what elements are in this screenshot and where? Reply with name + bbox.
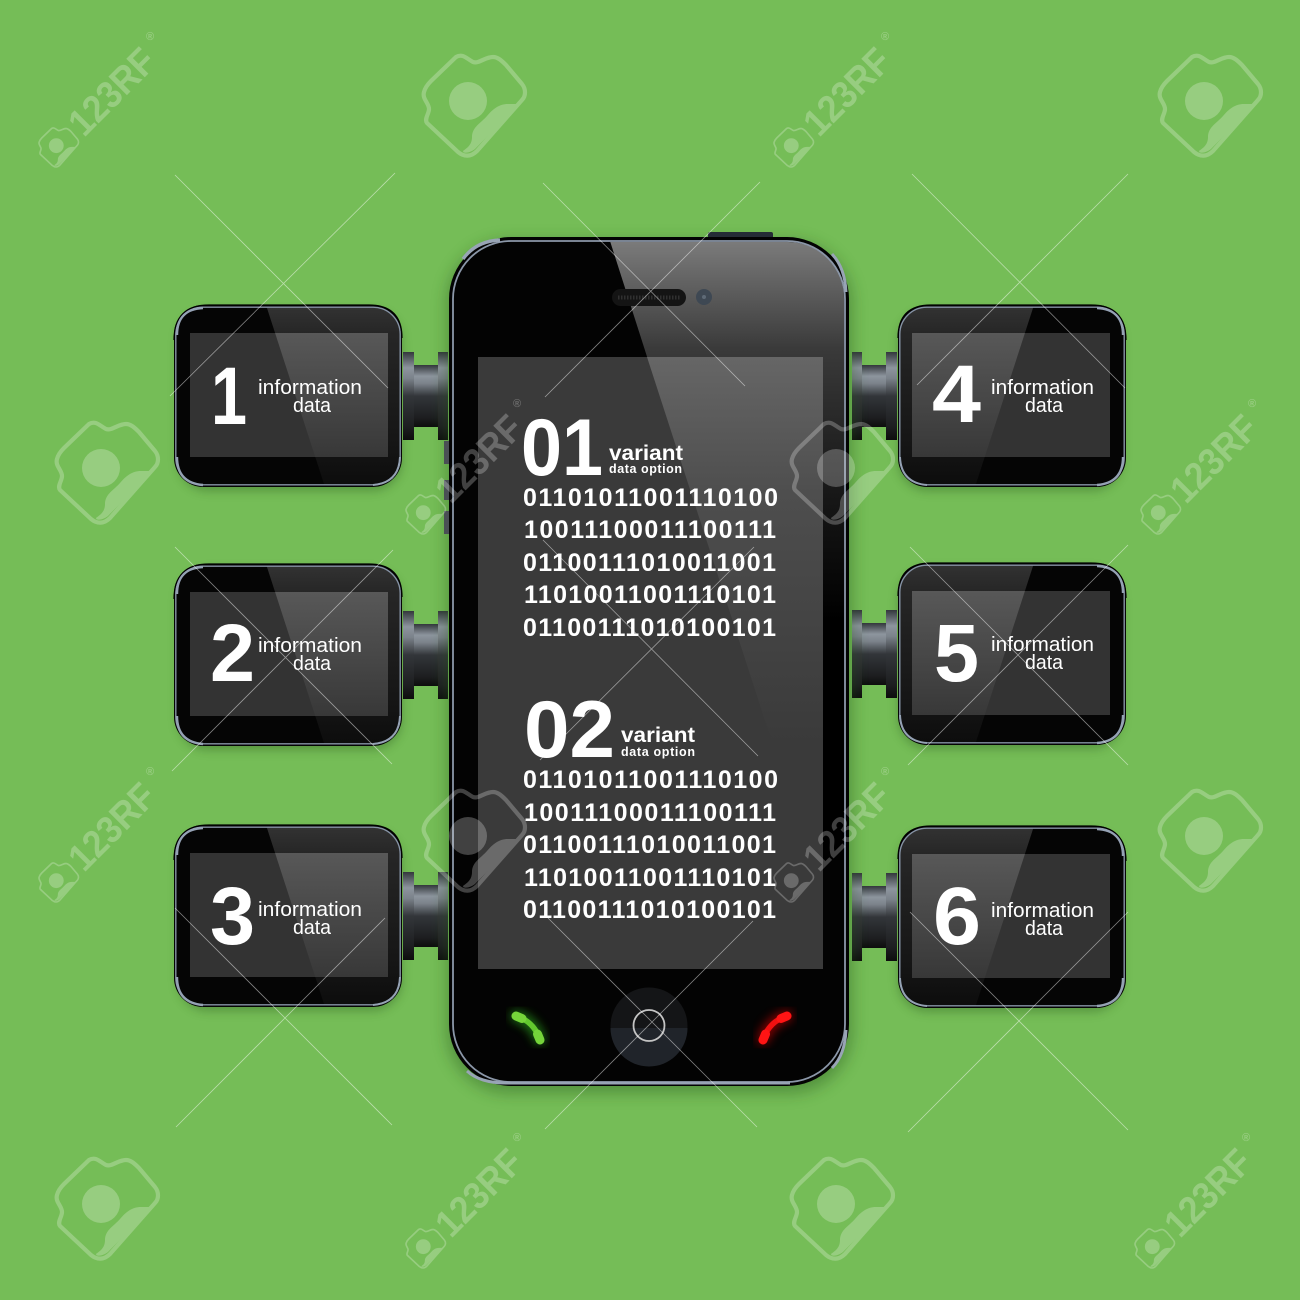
panel 2 label: information: [258, 635, 362, 657]
section 01 heading: variant: [609, 442, 683, 465]
panel 6 label: information: [991, 900, 1094, 922]
section 02 binary text: 01100111010100101: [523, 896, 776, 924]
section 01 binary text: [523, 484, 778, 642]
section 01 binary text: 11010011001110101: [524, 581, 776, 609]
icon: green call handset: [516, 1016, 540, 1040]
panel 6 label: data: [1025, 918, 1064, 940]
panel 2 device: [174, 564, 448, 750]
panel 3 device: [174, 825, 448, 1011]
watermark logos: ®: [146, 31, 154, 43]
section 01 subheading: data option: [609, 462, 682, 476]
section 02 binary text: 11010011001110101: [524, 864, 776, 892]
section 01 binary text: 10011100011100111: [524, 516, 776, 544]
panel 4: [852, 305, 1126, 491]
section 01 binary text: 01101011001110100: [523, 484, 778, 512]
home button: [610, 988, 688, 1066]
speaker grille: [612, 289, 686, 306]
icon: red hang-up handset: [763, 1016, 787, 1040]
panel 5 number: 5: [934, 608, 979, 699]
panel 3 label: data: [293, 917, 332, 939]
panel 6: [852, 826, 1126, 1012]
watermark logos: 123RF: [1163, 407, 1267, 511]
section 02 binary text: 01100111010011001: [523, 831, 776, 859]
panel 1: [174, 305, 448, 491]
panel 5 device: [852, 563, 1126, 749]
smartphone: [444, 232, 852, 1093]
section 02 subheading: data option: [621, 745, 695, 759]
side buttons: [444, 441, 450, 534]
power button: [708, 232, 773, 240]
phone body: [449, 237, 849, 1086]
watermark logos: ®: [881, 766, 889, 778]
watermark logos: 123RF: [61, 775, 165, 879]
panel 1 label: information: [258, 377, 362, 399]
panel 2 number: 2: [210, 608, 255, 699]
panel 1 device: [174, 305, 448, 491]
panel 6 number: 6: [933, 871, 981, 962]
watermark logos: 123RF: [428, 407, 532, 511]
section 01 number: 01: [521, 403, 603, 493]
bezel glare: [610, 242, 844, 560]
watermark logos: ®: [513, 398, 521, 410]
panel 4 number: 4: [932, 349, 981, 440]
section 02: [523, 685, 778, 924]
panel 5 label: information: [991, 634, 1094, 656]
panel 5 label: data: [1025, 652, 1064, 674]
section 02 binary text: 01101011001110100: [523, 766, 778, 794]
watermark logos: ®: [1248, 398, 1256, 410]
panel 3: [174, 825, 448, 1011]
panel 3 label: information: [258, 899, 362, 921]
section 02 binary text: 10011100011100111: [524, 799, 776, 827]
watermark logos: ®: [146, 766, 154, 778]
phone shadow: [447, 241, 852, 1093]
phone screen: [478, 357, 823, 969]
watermark lines: [170, 173, 1128, 1132]
section 01 binary text: 01100111010100101: [523, 614, 776, 642]
section 02 binary text: [523, 766, 778, 924]
panel 4 label: data: [1025, 395, 1064, 417]
section 01: [521, 403, 778, 642]
panel 2 label: data: [293, 653, 332, 675]
watermark logos: 123RF: [1157, 1141, 1261, 1245]
front camera: [696, 289, 712, 305]
panel 1 label: data: [293, 395, 332, 417]
section 02 heading: variant: [621, 724, 695, 747]
section 01 binary text: 01100111010011001: [523, 549, 776, 577]
watermark logos: ®: [513, 1132, 521, 1144]
panel 4 device: [852, 305, 1126, 491]
panel 3 number: 3: [210, 871, 255, 962]
watermark logos: ®: [1242, 1132, 1250, 1144]
screen glare: [647, 357, 823, 644]
watermark logos: ®: [881, 31, 889, 43]
watermark logos: 123RF: [61, 40, 165, 144]
panel 1 number: 1: [211, 351, 247, 442]
panel 6 device: [852, 826, 1126, 1012]
watermark logos: 123RF: [428, 1141, 532, 1245]
panel 5: [852, 563, 1126, 749]
panel 2: [174, 564, 448, 750]
watermark logos: 123RF: [796, 775, 900, 879]
metal rim: [453, 240, 846, 1083]
section 02 number: 02: [524, 685, 615, 775]
panel 4 label: information: [991, 377, 1094, 399]
watermark logos: 123RF: [796, 40, 900, 144]
